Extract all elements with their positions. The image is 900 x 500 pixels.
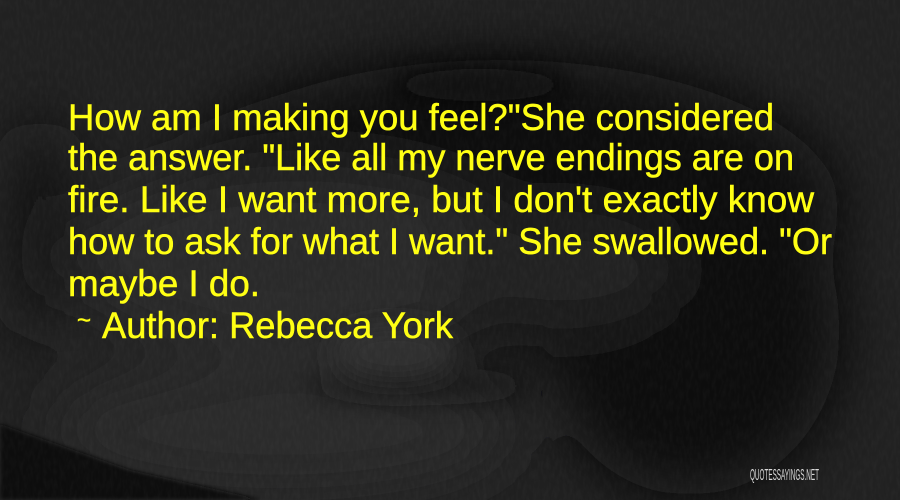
table corner xyxy=(0,424,262,500)
quote line 2: the answer. "Like all my nerve endings are on xyxy=(68,137,794,178)
tilde: ~ xyxy=(77,307,91,334)
quote line 5: maybe I do. xyxy=(68,263,260,304)
quote line 4: how to ask for what I want." She swallowed. "Or xyxy=(68,221,832,262)
quote line 1: How am I making you feel?"She considered xyxy=(68,97,774,138)
quote line 3: fire. Like I want more, but I don't exactly know xyxy=(68,179,814,220)
author attribution xyxy=(77,305,453,346)
quote text xyxy=(68,97,832,304)
author name: Author: Rebecca York xyxy=(102,305,453,346)
